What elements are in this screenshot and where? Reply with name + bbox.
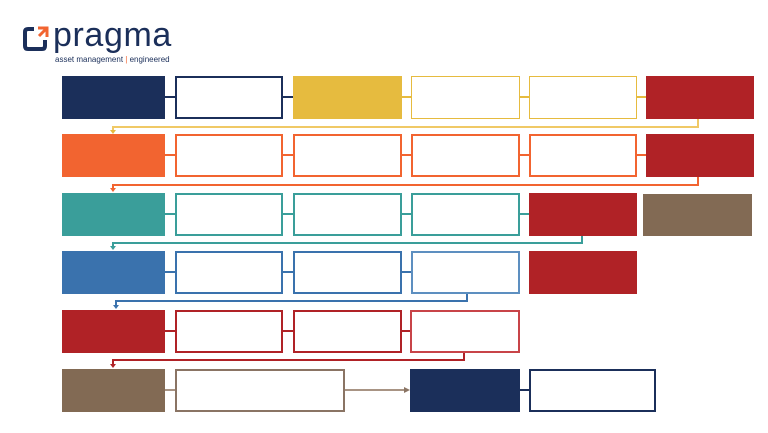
tagline: asset management | engineered xyxy=(55,55,170,64)
icon: logo mark xyxy=(23,26,48,51)
logo xyxy=(23,16,172,64)
row 4 xyxy=(62,251,165,294)
brand name: pragma xyxy=(53,16,172,54)
row 3 xyxy=(62,193,165,236)
row 2 xyxy=(62,134,165,177)
row 6 xyxy=(62,369,165,412)
row 5 xyxy=(62,310,165,353)
row 1 xyxy=(62,76,165,119)
